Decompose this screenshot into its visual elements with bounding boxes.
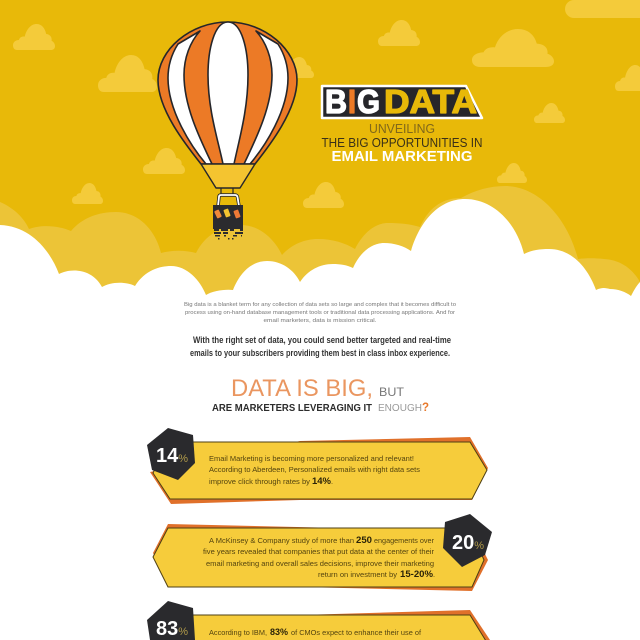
- hexagon badge: [443, 514, 492, 567]
- banner text: According to IBM,: [209, 628, 267, 637]
- panel: 14% banner: [147, 428, 488, 504]
- badge value: 83%: [156, 618, 188, 640]
- subtitle line: email marketing: EMAIL MARKETING: [332, 148, 472, 165]
- light cloud layer: [0, 186, 640, 320]
- basket data drips: [214, 229, 243, 240]
- bold intro statement: [190, 335, 451, 358]
- title: BIG DATA: [322, 83, 482, 120]
- title word: BIG: [325, 83, 380, 120]
- sky background: [0, 0, 640, 300]
- balloon ropes: [221, 188, 233, 195]
- balloon envelope: [158, 22, 297, 164]
- badge value: 14%: [156, 445, 188, 467]
- hexagon badge: [147, 428, 195, 480]
- intro paragraph: Big data is a blanket term for any collection of data sets so large and complex that it becomes difficult to: [184, 302, 456, 308]
- bold intro statement: emails to your subscribers providing them best in class inbox experience.: [190, 348, 450, 358]
- intro paragraph: [184, 302, 456, 324]
- subtitle line: opportunities: THE BIG OPPORTUNITIES IN: [322, 135, 482, 150]
- banner text: Email Marketing is becoming more personalized and relevant!: [209, 454, 414, 463]
- banner text: improve click through rates by: [209, 477, 310, 486]
- title word: BIG: B: [325, 83, 347, 120]
- banner body: [153, 615, 486, 640]
- intro paragraph: email marketers, data is mission critical.: [264, 318, 377, 324]
- subtitle: [322, 121, 482, 165]
- banner text: of CMOs expect to enhance their use of: [291, 628, 422, 637]
- banner text: 14%: [312, 476, 331, 486]
- banner shadow: [153, 524, 488, 591]
- basket tags: [214, 208, 241, 219]
- banner text: 15-20%: [400, 569, 433, 579]
- title word: BIG: G: [357, 83, 380, 120]
- balloon handle outline: [218, 195, 239, 206]
- section heading: [212, 375, 429, 414]
- heading: enough: ENOUGH: [378, 402, 422, 414]
- heading: are marketers leveraging it: ARE MARKETERS LEVERAGING IT: [212, 402, 373, 414]
- banner text: A McKinsey & Company study of more than: [209, 536, 354, 545]
- heading: data is big: DATA IS BIG,: [231, 375, 373, 402]
- banner text: [209, 454, 420, 486]
- banner text: 83%: [270, 627, 288, 637]
- banner body: [153, 528, 484, 587]
- intro paragraph: process using on-hand database management tools or traditional data processing applications. And for: [185, 310, 455, 316]
- banner text: five years revealed that companies that put data at the center of their: [203, 547, 435, 556]
- banner shadow: [150, 437, 488, 504]
- title word: BIG: I: [348, 83, 356, 120]
- background clouds: [13, 0, 640, 208]
- banner text: email marketing and overall sales decisions, improve their marketing: [206, 559, 434, 568]
- balloon handle: [218, 195, 239, 206]
- bold intro statement: With the right set of data, you could send better targeted and real-time: [193, 335, 451, 345]
- title dark backing with white outline: [322, 86, 482, 118]
- balloon basket: [213, 205, 243, 229]
- banner text: return on investment by: [318, 570, 397, 579]
- banner text: engagements over: [374, 536, 435, 545]
- banner body: [153, 442, 487, 499]
- banner text: .: [433, 570, 435, 579]
- foreground white clouds: [0, 199, 640, 320]
- hexagon badge: [147, 601, 195, 640]
- subtitle line: unveiling: UNVEILING: [369, 121, 435, 136]
- badge value: 20%: [452, 532, 484, 554]
- heading: but: BUT: [379, 387, 404, 399]
- banner text: .: [331, 477, 333, 486]
- banner shadow: [300, 610, 490, 640]
- banner text: [203, 535, 435, 579]
- icon: hot air balloon: [158, 22, 297, 240]
- panel: 83% banner: [147, 601, 490, 640]
- heading: question mark: ?: [422, 402, 429, 414]
- title word: DATA: DATA: [384, 83, 477, 120]
- banner text: According to Aberdeen, Personalized emails with right data sets: [209, 465, 420, 474]
- panel: 20% banner: [153, 514, 492, 591]
- banner text: 250: [356, 535, 372, 545]
- banner text: [209, 627, 422, 637]
- balloon burner skirt: [201, 164, 255, 188]
